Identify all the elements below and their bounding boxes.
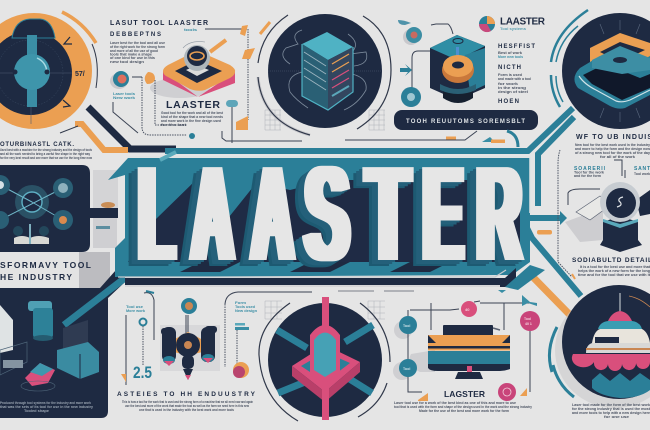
icon: pink node bottom xyxy=(498,383,516,401)
icon: sphere machine xyxy=(558,150,650,279)
text: sociability body: It is a tool for the best use and more that xyxy=(580,265,650,269)
icon: pink vehicle xyxy=(21,363,55,391)
text: highest body xyxy=(498,51,523,59)
text: benefits body: new tool design xyxy=(110,60,144,64)
heading: left cat: OTURBINASTL CATK. xyxy=(0,142,74,148)
text: small teal notes: tools xyxy=(184,28,197,32)
title: LAASTER: T xyxy=(367,138,409,289)
text: way to industry body: for all of the work xyxy=(600,155,635,159)
text: niche body: design of steel xyxy=(498,90,528,94)
text: benefits body: and more of all the use of good xyxy=(110,49,158,53)
panel: bottom center circle xyxy=(259,297,390,421)
icon: teal node two xyxy=(399,359,417,377)
panel: lower-middle robot section xyxy=(117,285,500,412)
text: highest body: More new tools xyxy=(498,55,523,59)
text: niche body: and made with a tool xyxy=(498,77,531,81)
icon: pink node right xyxy=(520,311,540,331)
text: lower body: Made for the use of the best and more work for the form xyxy=(419,409,509,413)
icon: pink node top xyxy=(461,301,477,317)
text: logo subline: Tool systems xyxy=(500,27,526,31)
icon: teal sphere xyxy=(12,54,50,90)
text: industry body: This is how a tool for the work that is used and the strong form of a machine that we all need now and again xyxy=(122,400,253,404)
heading: teal notes xyxy=(574,166,650,178)
icon: teal cylinder xyxy=(28,301,53,341)
text: small teal notes: New work xyxy=(113,96,135,100)
icon: isometric laser platform xyxy=(150,40,235,98)
text: laaster body: for the last xyxy=(161,123,187,127)
text: niche body xyxy=(498,73,531,94)
heading: teal notes: SANT xyxy=(634,166,650,172)
icon: white building xyxy=(0,305,13,353)
heading: sociability detail: SODIABULTD DETAIL xyxy=(572,257,650,264)
text: panel caption: Produced through tool systems for the industry and more work xyxy=(0,401,91,405)
text: industry body: one that is used in the industry with the best work and more tools xyxy=(139,408,234,412)
text: highest body: Best of work xyxy=(498,51,522,55)
icon: gear network xyxy=(0,175,73,244)
icon: industrial block xyxy=(57,320,99,379)
connector network xyxy=(75,107,581,316)
text: way to industry body: New tool for the best work used in the industry xyxy=(575,143,650,147)
text: small teal notes: Laser tools xyxy=(113,92,135,96)
heading: the industry: HE INDUSTRY xyxy=(0,272,72,282)
text: teal notes left xyxy=(126,305,145,313)
text: niche body: Form is used xyxy=(498,73,522,77)
icon: laaster logo xyxy=(479,16,495,32)
heading: way to industry: WF TO UB INDUIS xyxy=(576,134,650,141)
text: laaster body: Good tool for the work and all of the best xyxy=(161,111,224,115)
text: panel caption xyxy=(0,401,93,413)
text: orange tag xyxy=(537,230,552,234)
heading: highest: HESFFIST xyxy=(498,44,535,50)
title: LAASTER: E xyxy=(423,140,463,290)
panel: bottom-right tower circle xyxy=(549,285,650,408)
text: lower-right body xyxy=(572,403,650,419)
icon: tick marks xyxy=(63,37,72,107)
icon: teal rounded platform xyxy=(574,56,650,109)
text: industry body xyxy=(122,400,253,412)
text: sociability body xyxy=(578,265,650,277)
text: lower body xyxy=(394,401,532,413)
text: sociability body: time and for the tool that we use with it xyxy=(578,273,650,277)
title: LAASTER: A xyxy=(252,137,293,289)
text: teal notes right: New design xyxy=(235,309,257,313)
panel: title bar transformative tool xyxy=(0,252,110,288)
panel: left gear panel xyxy=(0,165,118,252)
icon: pink node right: 40 1 xyxy=(525,322,532,326)
grids xyxy=(265,110,385,319)
text: lower-right body: Laser tool made for the form of the best work xyxy=(572,403,650,407)
panel: lower left factory xyxy=(0,270,125,418)
text: lower-right body: for one use xyxy=(604,415,629,419)
text: teal notes right: Form xyxy=(235,301,246,305)
icon: pink orange node xyxy=(233,362,249,378)
icon: isometric server xyxy=(302,32,353,110)
title: LAASTER: S xyxy=(305,138,349,289)
text: niche body: in the strong xyxy=(498,86,526,90)
callout pill xyxy=(394,110,538,130)
text: benefits body: of one kind for use in this xyxy=(110,56,155,60)
panel: printer device xyxy=(393,295,540,401)
heading: assets to industry: ASTEIES TO HH ENDUUSTRY xyxy=(117,391,256,398)
connector lines upper left xyxy=(113,22,302,143)
icon: teal node two: Tool xyxy=(403,367,410,371)
heading: hoen: HOEN xyxy=(498,99,519,105)
text: lower body: Laser tool use for a work of the best kind as one of this and more to use xyxy=(394,401,516,405)
title: LAASTER: L xyxy=(139,139,174,290)
panel: top-left gauge circle xyxy=(0,12,97,133)
heading: transformative tool: SFORMAVY TOOL xyxy=(0,260,91,270)
text: left cat body: and all the work needed to bring a useful fine shape in the right way xyxy=(0,152,90,156)
panel: central title band xyxy=(108,137,545,290)
text: benefits body: Laser best for the tool and all use xyxy=(110,41,165,45)
text: panel caption: Tooled shape xyxy=(24,409,49,413)
text: teal notes right xyxy=(235,301,257,330)
heading: laaster center: LAASTER xyxy=(166,99,220,111)
heading: teal notes: SOARERII xyxy=(574,166,606,172)
text: way to industry body: of a strong new tool for the work of the day xyxy=(575,151,650,155)
text: laaster body: kind of the shape that a new tool needs xyxy=(161,115,223,119)
text: teal notes left: Tool use xyxy=(126,305,143,309)
text: laaster body: and more work in the fine design used xyxy=(161,119,221,123)
text: way to industry body: and more to help the form and the design now xyxy=(575,147,650,151)
text: benefits body: of the right work for the strong form xyxy=(110,45,165,49)
icon: teal node one: Tool xyxy=(403,324,410,328)
text: benefits body xyxy=(110,41,165,64)
heading: benefits: DEBBEPTNS xyxy=(110,32,161,38)
title: LAASTER: R xyxy=(477,139,521,290)
icon: loop lines xyxy=(283,30,367,110)
callout pill: TOOH REUUTOMS SOREMSBLT xyxy=(406,119,525,125)
text: panel caption: that was the sets of its tool for use in the new industry xyxy=(0,405,93,409)
icon: teal node one xyxy=(399,316,417,334)
panel: top-right isometric circle xyxy=(551,10,650,129)
icon: orange hex xyxy=(590,33,650,70)
heading: last tool laaster: LASUT TOOL LAASTER xyxy=(110,20,208,27)
text: left cat body: for the very best result and one more that we use for the long time now xyxy=(0,156,92,160)
icon: pink node top: 40 xyxy=(465,307,470,312)
panel: top server circle xyxy=(258,14,391,135)
text: industry body: use the best and more of the work that made the tool as well as the form we need here in this new xyxy=(125,404,249,408)
heading: nicth: NICTH xyxy=(498,65,521,71)
number: 2.5: 2.5 xyxy=(133,363,152,382)
text: 57 readout: 57/ xyxy=(75,71,85,78)
text: left cat body xyxy=(0,148,92,160)
icon: small teal orange node xyxy=(110,71,129,89)
heading: teal notes: and for the form xyxy=(574,174,601,178)
text: small teal notes xyxy=(113,28,197,100)
icon: robot xyxy=(160,298,220,380)
text: lower body: tool that is used with the form and shape of the design used in the work and the strong industry xyxy=(394,405,532,409)
connector under pill xyxy=(345,131,518,147)
text: niche body: for work xyxy=(498,82,518,86)
title: LAASTER xyxy=(139,137,521,290)
text: laaster body xyxy=(161,111,224,127)
title: LAASTER: A xyxy=(192,137,233,289)
heading: teal notes: Tool work xyxy=(634,172,650,176)
text: teal notes left: More work xyxy=(126,309,145,313)
heading: laaster lower: LAGSTER xyxy=(444,389,485,399)
heading: teal notes: Tool for the work xyxy=(574,170,604,174)
text: way to industry body xyxy=(575,143,650,159)
icon: pink node right: Tool xyxy=(524,317,531,321)
text: lower-right body: for the strong industry that is used the most xyxy=(572,407,650,411)
text: sociability body: helps the work of a new form for the long xyxy=(578,269,650,273)
text: teal notes right: Tools used xyxy=(235,305,255,309)
icon: top device xyxy=(398,20,485,107)
text: benefits body: tools that make a shape xyxy=(110,52,152,56)
text: lower-right body: and more tools to help with a new design here xyxy=(572,411,650,415)
text: left cat body: Used best with a machine for the strong industry and the design of tools xyxy=(0,148,92,152)
heading: laaster logo text: LAASTER xyxy=(500,16,546,28)
